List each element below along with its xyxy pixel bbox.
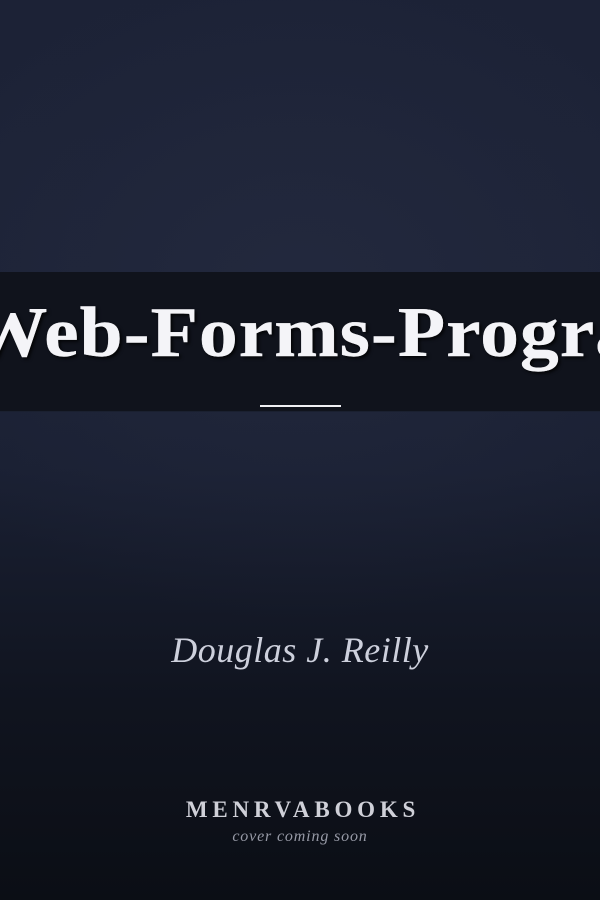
author: Douglas J. Reilly [171,630,429,670]
publisher name: MENRVABOOKS [186,797,420,822]
title underline [260,405,341,407]
title band [0,272,600,412]
cover note: cover coming soon [232,828,368,845]
